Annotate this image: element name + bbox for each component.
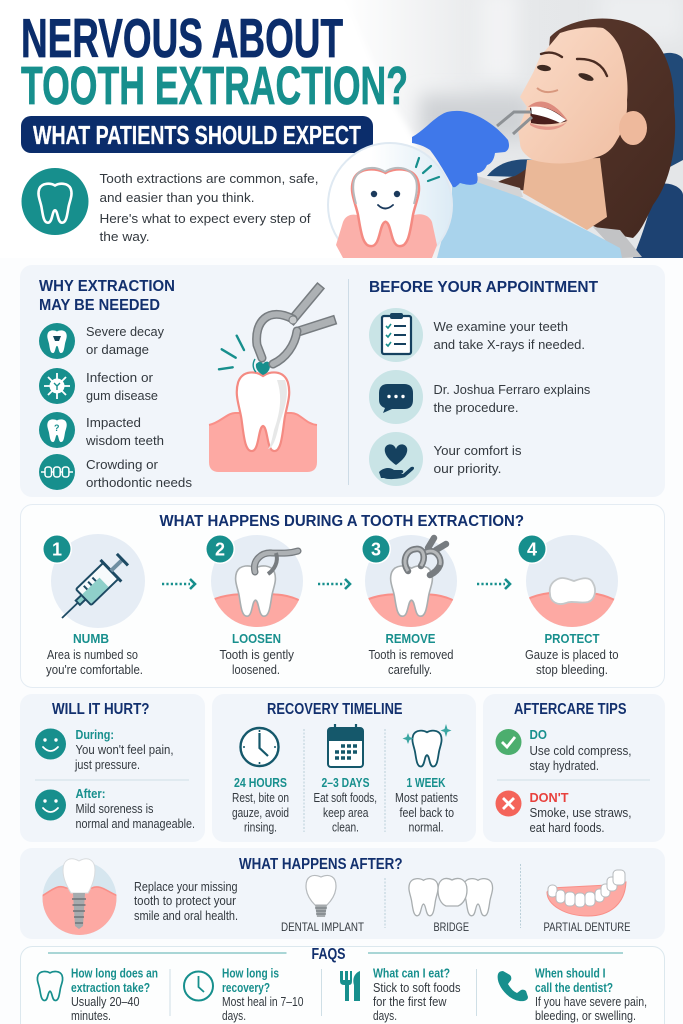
label: protect: [525, 631, 618, 677]
text: 2-3 days: clean.: [332, 820, 359, 834]
icon: calendar: [328, 724, 363, 767]
text: during: You won't feel pain,: [76, 742, 174, 757]
title: NERVOUS ABOUT: [21, 7, 343, 69]
icon: don't cross: [496, 790, 522, 816]
panel: will it hurt: [20, 694, 205, 842]
text: infection: gum disease: [86, 388, 158, 403]
step 1: syringe: 1: [52, 540, 62, 560]
option: partial denture: PARTIAL DENTURE: [544, 922, 631, 934]
heading: why extraction: WHY EXTRACTION: [39, 278, 175, 295]
text: during: [74, 727, 174, 772]
label: loosen: loosened.: [232, 662, 280, 677]
text: don't: DON'T: [530, 790, 569, 805]
label: numb: NUMB: [73, 631, 109, 646]
text: examine: We examine your teeth: [434, 319, 568, 334]
icon: tooth outline: [37, 972, 63, 1000]
option: bridge: [409, 878, 493, 934]
FAQ 1: How long does an: [71, 966, 158, 980]
FAQ 2: Most heal in 7–10: [222, 994, 304, 1009]
option: dental implant: [281, 875, 364, 934]
text: 1 week: feel back to: [400, 805, 454, 820]
text: after: [76, 786, 195, 831]
FAQ 1: extraction take?: [71, 980, 150, 995]
title: [21, 7, 408, 116]
text: infection: [86, 370, 158, 403]
text: 24 hours: rinsing.: [244, 820, 277, 834]
text: crowding: Crowding or: [86, 457, 159, 472]
icon: smiling tooth badge: [328, 143, 452, 267]
illustration: tooth with forceps: [209, 289, 331, 472]
heading: recovery timeline: RECOVERY TIMELINE: [267, 701, 402, 718]
step 2: loosen: [205, 534, 304, 630]
icon: clipboard: [369, 308, 423, 362]
step 4: gauze: 4: [527, 540, 537, 560]
FAQ 3: What can I eat?: [373, 966, 450, 980]
text: 1 week: 1 WEEK: [406, 775, 446, 790]
FAQ 2: recovery?: [222, 980, 270, 995]
label: remove: carefully.: [388, 662, 432, 677]
text: explains: Dr. Joshua Ferraro explains: [434, 382, 591, 397]
text: 2-3 days: 2–3 DAYS: [322, 775, 370, 790]
text: don't: Smoke, use straws,: [530, 805, 632, 820]
FAQ 3: Stick to soft foods: [373, 980, 461, 995]
text: replace tooth: smile and oral health.: [134, 908, 238, 923]
text: crowding: orthodontic needs: [86, 475, 193, 490]
FAQ 3: [373, 966, 461, 1023]
text: severe decay: or damage: [86, 342, 149, 357]
option: bridge: BRIDGE: [434, 922, 469, 934]
text: severe decay: Severe decay: [86, 324, 164, 339]
icon: impacted tooth: ?: [54, 423, 60, 433]
heading: before your appointment: BEFORE YOUR APPOINTMENT: [369, 279, 599, 296]
text: impacted: wisdom teeth: [85, 433, 164, 448]
panel: FAQs: [20, 946, 664, 1024]
text: during: During:: [76, 727, 114, 742]
text: comfort: Your comfort is: [434, 443, 522, 458]
heading: why extraction: [39, 278, 175, 314]
option: dental implant: DENTAL IMPLANT: [281, 922, 364, 934]
hero photo: patient in dental chair: [400, 0, 683, 258]
icon: phone: [498, 971, 528, 1001]
FAQ 2: days.: [222, 1008, 246, 1023]
title: TOOTH EXTRACTION?: [21, 56, 408, 116]
FAQ 3: for the first few: [373, 994, 447, 1009]
text: impacted: [85, 415, 164, 448]
intro text: and easier than you think.: [100, 190, 254, 205]
step 1: syringe: [42, 534, 145, 629]
label: numb: [46, 631, 143, 677]
step 3: remove: [361, 534, 458, 630]
text: comfort: our priority.: [434, 461, 502, 476]
icon: heart in hand: [369, 432, 423, 486]
text: comfort: [434, 443, 522, 476]
icon: intro tooth: [22, 168, 88, 235]
icon: decayed tooth: [39, 323, 75, 359]
icon: fork and knife: [340, 971, 360, 1001]
step 2: loosen: 2: [215, 540, 225, 560]
panel: aftercare tips: [483, 694, 665, 842]
text: 24 hours: 24 HOURS: [234, 775, 287, 790]
text: during: just pressure.: [74, 757, 140, 772]
option: partial denture: [544, 870, 631, 934]
text: replace tooth: tooth to protect your: [134, 893, 237, 908]
FAQ 4: call the dentist?: [535, 980, 613, 995]
label: remove: Tooth is removed: [368, 647, 454, 662]
text: explains: the procedure.: [434, 400, 518, 415]
label: numb: you're comfortable.: [46, 662, 143, 677]
text: 2-3 days: keep area: [323, 805, 369, 820]
text: 2-3 days: [314, 775, 377, 834]
FAQ 4: When should I: [535, 966, 606, 980]
label: protect: stop bleeding.: [536, 662, 608, 677]
text: after: After:: [76, 786, 106, 801]
icon: impacted tooth: [39, 412, 75, 448]
icon: infection: [39, 368, 75, 404]
text: replace tooth: Replace your missing: [134, 879, 238, 894]
text: explains: [434, 382, 591, 415]
FAQ 4: If you have severe pain,: [535, 994, 647, 1009]
icon: smiley after: [35, 790, 66, 820]
text: 24 hours: Rest, bite on: [232, 790, 289, 805]
arrow 1: [162, 579, 195, 589]
subtitle banner: WHAT PATIENTS SHOULD EXPECT: [33, 120, 361, 150]
icon: braces: [39, 454, 75, 490]
panel: why extraction and before appointment: [20, 265, 665, 497]
FAQ 2: [222, 966, 304, 1023]
text: do: Use cold compress,: [530, 743, 632, 758]
icon: smiley during: [35, 728, 66, 760]
text: do: DO: [530, 727, 547, 742]
label: protect: PROTECT: [544, 631, 600, 646]
intro text: [100, 171, 318, 244]
panel: recovery timeline: [212, 694, 476, 842]
text: examine: [434, 319, 585, 352]
text: crowding: [86, 457, 193, 490]
label: loosen: Tooth is gently: [220, 647, 294, 662]
text: replace tooth: [134, 879, 238, 923]
text: severe decay: [86, 324, 164, 357]
text: don't: eat hard foods.: [530, 820, 604, 835]
heading: what happens after: WHAT HAPPENS AFTER?: [239, 856, 402, 873]
icon: clock outline: [184, 972, 213, 1000]
text: 1 week: [395, 775, 458, 834]
FAQ 1: Usually 20–40: [71, 994, 140, 1009]
icon: sparkling tooth: [402, 724, 452, 767]
panel: during extraction steps: [20, 504, 664, 688]
illustration: implant with gum: [42, 859, 118, 940]
text: after: Mild soreness is: [76, 801, 154, 816]
intro text: Tooth extractions are common, safe,: [100, 171, 318, 186]
label: numb: Area is numbed so: [47, 647, 138, 662]
text: 24 hours: [232, 775, 289, 834]
label: remove: REMOVE: [386, 631, 436, 646]
text: impacted: Impacted: [86, 415, 141, 430]
text: 2-3 days: Eat soft foods,: [314, 790, 377, 805]
FAQ 3: days.: [373, 1008, 397, 1023]
text: do: stay hydrated.: [530, 758, 599, 773]
heading: during extraction: WHAT HAPPENS DURING A TOOTH EXTRACTION?: [160, 513, 524, 530]
icon: chat bubble: [369, 370, 423, 424]
text: 1 week: normal.: [408, 820, 444, 834]
FAQ 4: [535, 966, 647, 1023]
icon: clock: [240, 728, 278, 766]
intro text: the way.: [100, 229, 150, 244]
FAQ 2: How long is: [222, 966, 279, 980]
FAQ 1: minutes.: [71, 1008, 111, 1023]
text: do: [530, 727, 632, 773]
heading: why extraction: MAY BE NEEDED: [39, 297, 160, 314]
label: remove: [368, 631, 454, 677]
text: 1 week: Most patients: [395, 790, 458, 805]
subtitle banner: [21, 116, 373, 153]
icon: do check: [496, 729, 522, 755]
heading: FAQs: FAQS: [312, 946, 346, 963]
arrow 3: [477, 579, 510, 589]
FAQ 1: [71, 966, 158, 1023]
label: loosen: [220, 631, 294, 677]
text: infection: Infection or: [86, 370, 154, 385]
text: examine: and take X-rays if needed.: [434, 337, 585, 352]
heading: will it hurt: WILL IT HURT?: [52, 701, 150, 718]
label: loosen: LOOSEN: [232, 631, 281, 646]
heading: aftercare tips: AFTERCARE TIPS: [514, 701, 626, 718]
text: after: normal and manageable.: [76, 816, 195, 831]
panel: what happens after: [20, 848, 665, 940]
FAQ 4: bleeding, or swelling.: [535, 1008, 636, 1023]
text: 24 hours: gauze, avoid: [232, 805, 289, 820]
intro text: Here's what to expect every step of: [100, 211, 311, 226]
step 3: remove: 3: [371, 540, 381, 560]
arrow 2: [318, 579, 350, 589]
step 4: gauze: [517, 534, 618, 630]
text: don't: [530, 790, 632, 835]
label: protect: Gauze is placed to: [525, 647, 618, 662]
